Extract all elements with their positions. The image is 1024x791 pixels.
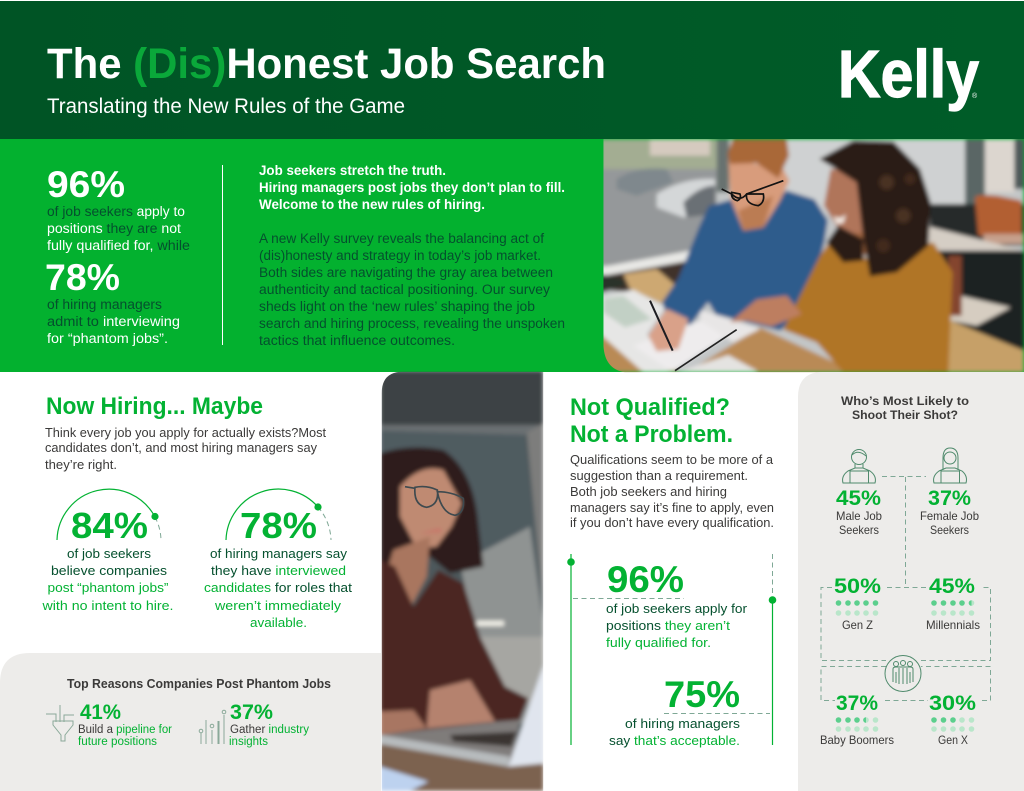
stat: 78 percent: for “phantom jobs”. <box>47 331 168 346</box>
gauge: 84 percent: 84% <box>71 505 148 546</box>
stat: 78 percent: admit to interviewing <box>47 314 180 329</box>
intro body text: tactics that influence outcomes. <box>259 333 455 348</box>
intro lead text: Job seekers stretch the truth. <box>259 163 446 178</box>
gauge: 78 percent <box>226 489 331 546</box>
stat: millennials <box>926 574 980 632</box>
stat timeline: 96 percent: fully qualified for. <box>606 635 711 650</box>
connector lines <box>821 476 990 700</box>
intro lead text <box>259 163 565 212</box>
stat: 96 percent: 96% <box>47 164 125 205</box>
stat timeline: 75 percent: of hiring managers <box>625 716 741 731</box>
stat: 37 percent: Gather industry <box>230 724 309 736</box>
intro body text: authenticity and tactical positioning. Our survey <box>259 282 550 297</box>
stat: 37 percent: 37% <box>230 700 273 724</box>
stat timeline: 75 percent <box>609 554 776 748</box>
stat text: 84 percent: with no intent to hire. <box>41 598 174 613</box>
logo: Kelly: Kelly <box>838 37 979 112</box>
icon: signal bars <box>199 710 226 744</box>
stat text: 84 percent: of job seekers <box>67 546 152 561</box>
stat timeline: 96 percent <box>567 554 748 745</box>
stat: female job seekers <box>920 486 979 537</box>
intro paragraph: Think every job you apply for actually exists?Most <box>45 426 327 440</box>
intro body text: sheds light on the ‘new rules’ shaping the job <box>259 299 535 314</box>
stat: female job seekers: Seekers <box>930 523 969 537</box>
stat: baby boomers: Baby Boomers <box>820 733 894 747</box>
stat text: 78 percent <box>204 546 352 630</box>
stat text: 78 percent: weren’t immediately <box>214 598 342 613</box>
stat: 78 percent: of hiring managers <box>47 297 162 312</box>
stat timeline: 96 percent: of job seekers apply for <box>606 601 748 616</box>
logo: Kelly: ® <box>972 92 978 100</box>
stat: 37 percent <box>229 700 309 748</box>
stat: 41 percent <box>78 700 172 748</box>
stat: male job seekers: Seekers <box>839 523 879 537</box>
photo: woman working at a laptop <box>380 370 543 791</box>
stat: millennials: 45% <box>929 574 975 598</box>
intro paragraph <box>45 426 327 472</box>
panel: intro green band <box>0 139 1024 372</box>
stat: baby boomers <box>820 691 894 747</box>
stat: 96 percent <box>47 164 190 253</box>
stat text: 84 percent <box>41 546 174 613</box>
stat: female job seekers: 37% <box>928 486 971 510</box>
panel: top reasons <box>0 653 381 791</box>
gauge: 78 percent: 78% <box>240 505 317 546</box>
intro body text <box>259 231 565 348</box>
stat timeline: 75 percent: say that’s acceptable. <box>609 733 740 748</box>
intro paragraph: they’re right. <box>45 458 117 472</box>
intro paragraph: suggestion than a requirement. <box>570 469 748 483</box>
panel: not qualified <box>567 394 776 748</box>
stat: male job seekers: Male Job <box>836 509 882 523</box>
stat timeline: 96 percent: 96% <box>607 559 684 600</box>
photo: two colleagues at a laptop <box>600 139 1024 372</box>
stat: 41 percent: future positions <box>78 736 157 748</box>
stat: gen x: Gen X <box>938 733 968 747</box>
heading: Not Qualified? <box>570 394 730 421</box>
intro body text: Both sides are navigating the gray area between <box>259 265 553 280</box>
stat text: 78 percent: candidates for roles that <box>204 580 352 595</box>
stat: millennials: Millennials <box>926 618 980 632</box>
panel: now hiring <box>41 393 352 630</box>
stat: 78 percent: 78% <box>45 257 120 298</box>
heading: Now Hiring... Maybe <box>46 393 263 420</box>
stat: gen z: 50% <box>834 574 881 598</box>
intro paragraph <box>570 453 774 530</box>
stat: 96 percent: of job seekers apply to <box>47 204 185 219</box>
intro paragraph: managers say it’s fine to apply, even <box>570 501 774 515</box>
panel: who's most likely <box>798 372 1024 791</box>
icon: female job seeker <box>934 448 966 483</box>
stat text: 78 percent: they have interviewed <box>211 563 346 578</box>
stat: male job seekers <box>836 486 882 537</box>
icon: male job seeker <box>843 450 875 483</box>
stat: gen z <box>834 574 881 632</box>
subtitle: Translating the New Rules of the Game <box>47 94 405 118</box>
intro body text: search and hiring process, revealing the unspoken <box>259 316 565 331</box>
header band <box>0 1 1024 139</box>
intro paragraph: if you don’t have every qualification. <box>570 516 774 530</box>
intro body text: (dis)honesty and strategy in today’s job market. <box>259 248 541 263</box>
intro body text: A new Kelly survey reveals the balancing act of <box>259 231 544 246</box>
stat: baby boomers: 37% <box>836 691 878 715</box>
stat text: 78 percent: available. <box>250 615 307 630</box>
title: The (Dis)Honest Job Search <box>47 40 606 88</box>
stat text: 84 percent: post “phantom jobs” <box>48 580 168 595</box>
stat text: 84 percent: believe companies <box>51 563 168 578</box>
intro paragraph: candidates don’t, and most hiring managers say <box>45 441 318 455</box>
stat: gen x: 30% <box>929 691 976 715</box>
stat: 96 percent: positions they are not <box>47 221 181 236</box>
panel heading <box>841 394 969 422</box>
stat text: 78 percent: of hiring managers say <box>210 546 348 561</box>
stat: male job seekers: 45% <box>836 486 881 510</box>
stat: 41 percent: 41% <box>80 700 121 724</box>
stat timeline: 75 percent: 75% <box>664 674 740 715</box>
heading <box>570 394 733 448</box>
intro lead text: Welcome to the new rules of hiring. <box>259 197 485 212</box>
stat: female job seekers: Female Job <box>920 509 979 523</box>
panel heading: Top Reasons Companies Post Phantom Jobs <box>67 677 331 691</box>
stat: 41 percent: Build a pipeline for <box>78 724 172 736</box>
intro lead text: Hiring managers post jobs they don’t plan to fill. <box>259 180 565 195</box>
stat: 78 percent <box>45 257 180 346</box>
stat: 96 percent: fully qualified for, while <box>47 238 190 253</box>
intro paragraph: Both job seekers and hiring <box>570 485 727 499</box>
intro paragraph: Qualifications seem to be more of a <box>570 453 773 467</box>
panel heading: Shoot Their Shot? <box>852 408 958 422</box>
stat: gen z: Gen Z <box>842 618 873 632</box>
heading: Not a Problem. <box>570 421 733 448</box>
gauge: 84 percent <box>57 489 161 546</box>
icon: funnel <box>46 705 74 741</box>
stat: 37 percent: insights <box>229 736 268 748</box>
icon: group of people in circle <box>885 656 921 692</box>
stat: gen x <box>929 691 976 747</box>
panel heading: Who’s Most Likely to <box>841 394 969 408</box>
stat timeline: 96 percent: positions they aren’t <box>606 618 730 633</box>
